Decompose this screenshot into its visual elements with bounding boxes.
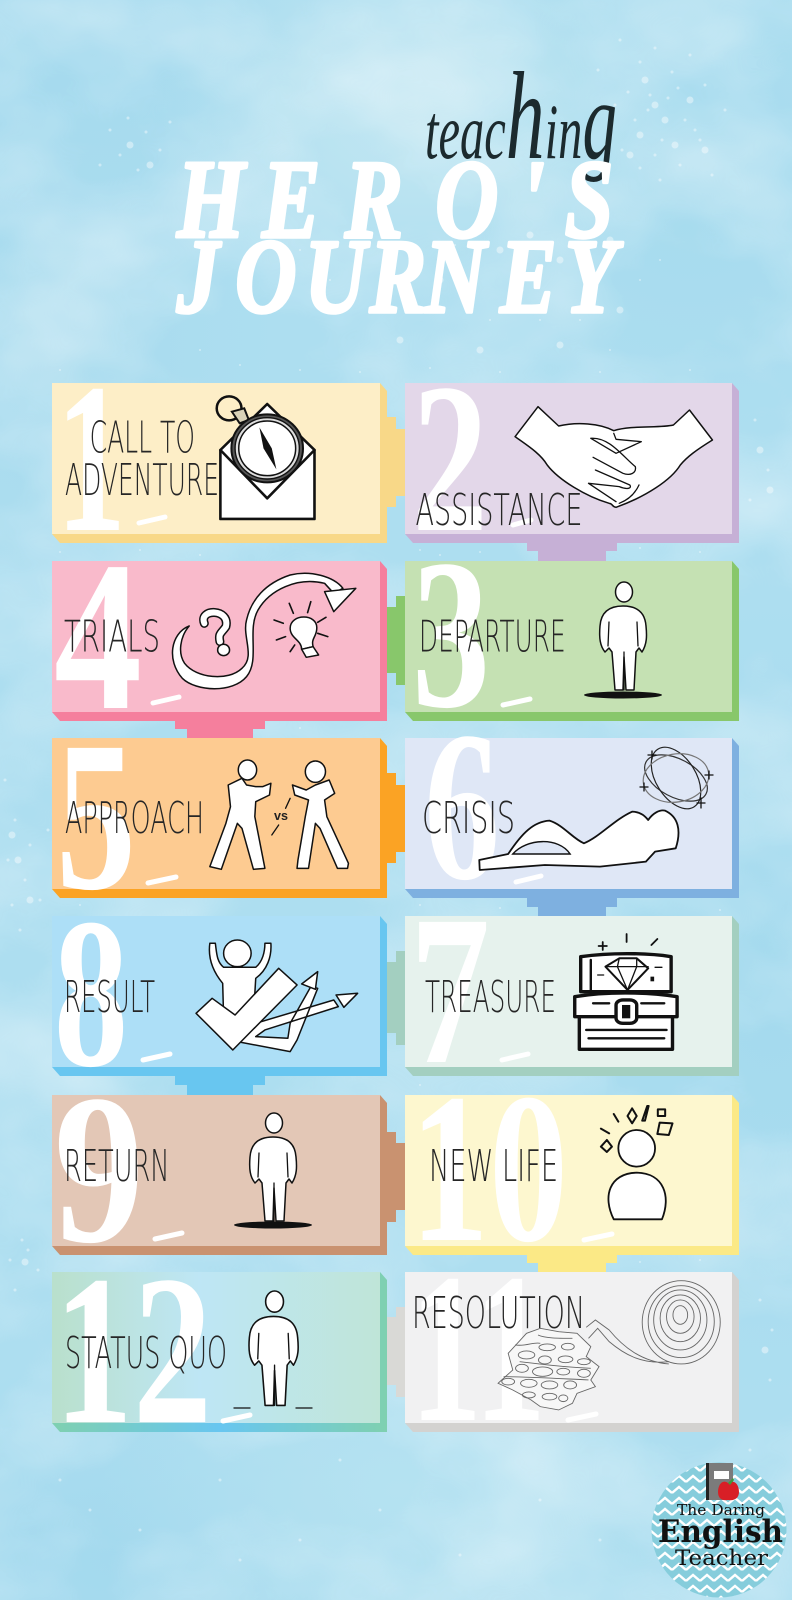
label: RETURN (64, 1141, 170, 1192)
logo: The Daring English Teacher: English (658, 1514, 783, 1550)
connector: 1 to 2 (387, 417, 405, 507)
label: CRISIS (422, 793, 515, 844)
icon: composition notebook (706, 1463, 733, 1500)
number 5: 5 (56, 698, 136, 935)
icon: winding arrow, question mark and bulb (172, 573, 356, 689)
icon: figure lying down (479, 810, 678, 870)
icon: walking figure (584, 582, 662, 698)
number 1: 1 (56, 340, 126, 577)
label: RESULT (64, 972, 155, 1023)
connector: 8 to 9 (175, 1076, 265, 1095)
connector: 9 to 10 (387, 1132, 405, 1222)
label: RESOLUTION (412, 1288, 585, 1339)
number 11: 11 (410, 1230, 546, 1467)
number 9: 9 (54, 1051, 144, 1288)
connector: 6 to 7 (527, 898, 617, 917)
panel: 2 assistance (405, 340, 739, 577)
label: ASSISTANCE (416, 485, 582, 536)
icon: treasure chest (575, 934, 677, 1049)
panel: 10 new life (405, 1050, 739, 1287)
connector: 2 to 3 (527, 543, 617, 561)
number 12: 12 (54, 1232, 212, 1469)
panel: 8 result (52, 875, 387, 1112)
number 3: 3 (412, 516, 490, 753)
icon: standing figure (234, 1291, 312, 1408)
icon: apple (718, 1478, 739, 1500)
connector: 4 to 5 (175, 721, 265, 739)
connector: 10 to 11 (527, 1255, 617, 1273)
label: STATUS QUO (65, 1328, 227, 1379)
icon: returning figure (234, 1113, 312, 1228)
number 8: 8 (54, 875, 128, 1112)
connector: 7 to 8 (387, 951, 405, 1045)
number 6: 6 (424, 688, 500, 925)
logo: The Daring English Teacher: Teacher (675, 1546, 769, 1570)
panel: 5 approach (52, 698, 405, 935)
panel: 9 return (52, 1051, 405, 1288)
connector: 11 to 12 (387, 1307, 405, 1397)
connector: 3 to 4 (387, 596, 405, 685)
icon: two fighters (210, 760, 348, 869)
icon label: vs: vs (274, 808, 288, 823)
icon: compass and envelope (217, 396, 314, 519)
title: hero's: HERO'S (176, 138, 613, 262)
title: teaching: teaching (425, 46, 617, 185)
icon: figure with sparkles (601, 1106, 673, 1219)
connector: 5 to 6 (387, 773, 405, 863)
logo: The Daring English Teacher (652, 1462, 786, 1598)
panel: 7 treasure (387, 872, 739, 1109)
panel: 11 resolution (387, 1230, 739, 1467)
number 2: 2 (412, 340, 488, 577)
icon: tangle unwinding to spiral (498, 1281, 720, 1410)
icon: clasped hands (515, 407, 712, 507)
label: TREASURE (425, 972, 556, 1023)
label: APPROACH (65, 793, 204, 844)
label: CALL TO (90, 413, 195, 464)
panel: 6 crisis (405, 688, 739, 925)
panel: 4 trials (52, 518, 387, 755)
label: TRIALS (64, 612, 160, 663)
panel: 3 departure (387, 516, 739, 753)
title: journey: JOURNEY (176, 217, 623, 335)
number 10: 10 (410, 1050, 568, 1287)
logo text: The Daring (677, 1501, 765, 1519)
panel: 12 status quo (52, 1232, 387, 1469)
icon: dizzy orbit (637, 739, 715, 817)
number 4: 4 (54, 518, 142, 755)
icon: cheering figure with check and arrows (196, 940, 358, 1052)
label: DEPARTURE (419, 612, 566, 663)
panel: 1 call to adventure: ADVENTURE (65, 455, 219, 506)
label: NEW LIFE (429, 1141, 558, 1192)
number 7: 7 (410, 872, 490, 1109)
panel: 1 call to adventure (52, 340, 405, 577)
